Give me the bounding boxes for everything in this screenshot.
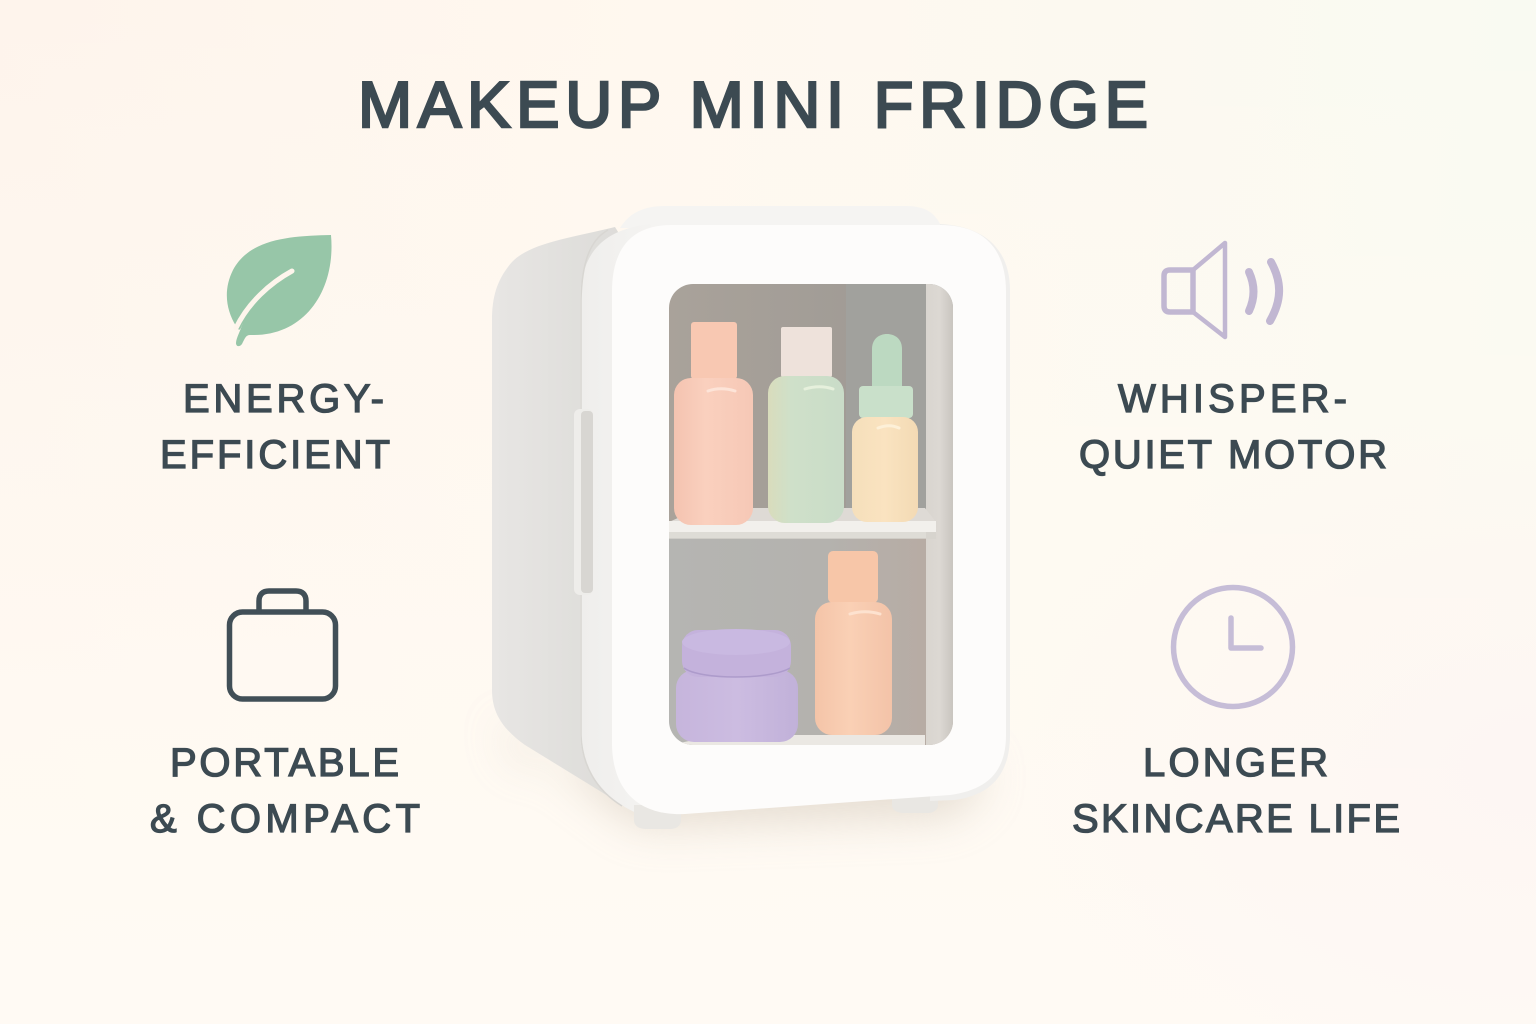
label: portable and compact: & COMPACT <box>150 797 420 841</box>
door handle <box>574 409 593 595</box>
upper compartment back <box>669 284 953 524</box>
bottle: peach tall <box>674 322 753 525</box>
door front face <box>612 225 1006 814</box>
feet <box>634 795 938 829</box>
door right rim <box>930 224 1010 801</box>
bottle: orange <box>815 551 892 735</box>
inner right wall <box>926 284 953 745</box>
fridge illustration <box>492 206 1010 829</box>
label: whisper-quiet motor <box>1079 377 1387 477</box>
label: energy-efficient: EFFICIENT <box>160 433 390 477</box>
window <box>669 284 953 745</box>
fridge side body <box>492 227 660 812</box>
label: portable and compact <box>150 741 420 841</box>
label: longer skincare life <box>1072 741 1400 841</box>
icon: leaf <box>227 235 332 346</box>
shelf surface <box>672 508 926 521</box>
lower compartment floor <box>669 735 925 745</box>
feature: longer skincare life <box>1072 588 1400 841</box>
feature: energy-efficient <box>160 235 390 477</box>
bottle: green <box>768 327 844 523</box>
icon: speaker <box>1164 243 1279 337</box>
bottle: dropper <box>852 334 918 522</box>
feature: portable and compact <box>150 591 420 841</box>
label: whisper-quiet motor: QUIET MOTOR <box>1079 433 1387 477</box>
label: energy-efficient <box>160 377 390 477</box>
lower compartment back <box>669 538 953 745</box>
icon: clock <box>1174 588 1292 706</box>
feature: whisper-quiet motor <box>1079 243 1387 477</box>
label: longer skincare life: SKINCARE LIFE <box>1072 797 1400 841</box>
label: whisper-quiet motor: WHISPER- <box>1118 377 1347 421</box>
jar: lavender <box>676 629 798 742</box>
title: MAKEUP MINI FRIDGE <box>358 68 1148 141</box>
door edge band <box>580 224 700 813</box>
floor shadow <box>500 720 980 825</box>
label: portable and compact: PORTABLE <box>170 741 399 785</box>
label: longer skincare life: LONGER <box>1143 741 1328 785</box>
shelf edge <box>669 521 936 532</box>
label: energy-efficient: ENERGY- <box>183 377 384 421</box>
icon: suitcase <box>230 591 336 699</box>
top lid <box>620 206 942 228</box>
